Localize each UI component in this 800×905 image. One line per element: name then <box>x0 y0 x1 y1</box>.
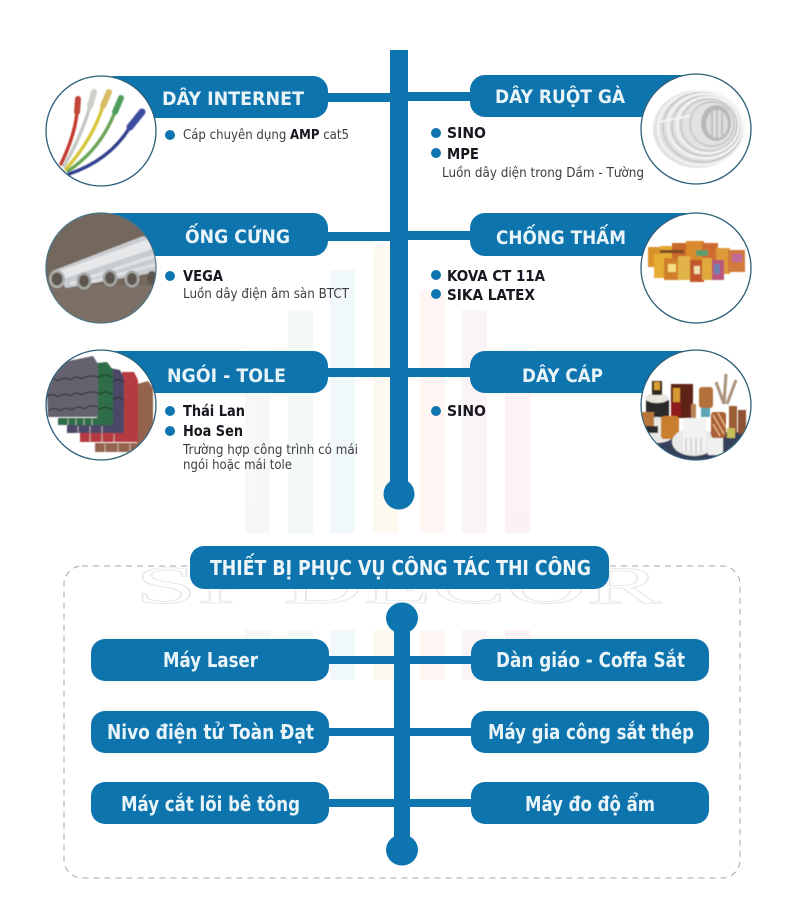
item: Dây cáp <box>405 350 751 460</box>
heading: Chống thấm: CHỐNG THẤM <box>496 225 626 249</box>
heading: Ngói - Tole: NGÓI - TOLE <box>167 365 286 387</box>
section title <box>190 546 609 589</box>
equipment: Dàn giáo - Coffa Sắt <box>471 639 709 681</box>
bullet list: Ngói - Tole: Thái Lan <box>183 402 245 420</box>
bullet list: Dây cáp <box>431 402 486 420</box>
photo: corrugated conduit coil <box>641 74 751 184</box>
item: Chống thấm <box>405 213 751 323</box>
item: Ống cứng <box>46 213 395 325</box>
heading: Ống cứng: ỐNG CỨNG <box>185 224 290 248</box>
bullet list: Dây ruột gà: MPE <box>447 145 479 163</box>
bullet list: Ống cứng <box>165 267 350 302</box>
bullet list: Chống thấm: KOVA CT 11A <box>447 267 545 285</box>
item: Dây Internet <box>46 76 395 186</box>
dashed equipment frame <box>64 566 740 878</box>
equipment: Máy đo độ ẩm: Máy đo độ ẩm <box>525 792 655 816</box>
heading: Dây cáp: DÂY CÁP <box>522 365 603 387</box>
equipment: Nivo điện tử Toàn Đạt: Nivo điện tử Toàn Đạt <box>107 720 314 744</box>
heading: Dây ruột gà: DÂY RUỘT GÀ <box>495 86 626 108</box>
bullet list: Ống cứng: VEGA <box>183 267 223 285</box>
bullet list: Ngói - Tole: Hoa Sen <box>183 422 243 440</box>
watermark: brand name: SP DECOR <box>135 557 662 615</box>
section title: THIẾT BỊ PHỤC VỤ CÔNG TÁC THI CÔNG <box>210 554 591 580</box>
photo: power cables <box>637 350 751 460</box>
heading: Dây Internet: DÂY INTERNET <box>162 88 304 110</box>
photo: network cables <box>46 76 156 186</box>
item: Ngói - Tole <box>46 350 395 473</box>
equipment: Máy gia công sắt thép <box>471 711 709 753</box>
equipment: Máy Laser: Máy Laser <box>163 648 258 672</box>
bullet list: Ngói - Tole: ngói hoặc mái tole <box>183 457 292 473</box>
photo: waterproofing products <box>641 213 751 323</box>
bullet list: Dây Internet: Cáp chuyên dụng AMP cat5 <box>183 127 349 143</box>
equipment: Nivo điện tử Toàn Đạt <box>91 711 329 753</box>
equipment: Máy đo độ ẩm <box>471 782 709 824</box>
top timeline spine <box>384 50 414 510</box>
equipment: Máy Laser <box>91 639 329 681</box>
item: Dây ruột gà <box>405 74 751 184</box>
equipment: Máy gia công sắt thép: Máy gia công sắt thép <box>488 720 694 744</box>
photo: rigid pipes <box>46 213 158 325</box>
bottom timeline spine <box>320 602 480 866</box>
bullet list: Ngói - Tole <box>165 402 358 473</box>
equipment: Dàn giáo - Coffa Sắt: Dàn giáo - Coffa Sắt <box>496 648 685 672</box>
bullet list: Dây ruột gà: Luồn dây diện trong Dầm - Tường <box>442 164 644 181</box>
bullet list: Dây ruột gà <box>431 124 644 181</box>
bullet list: Dây ruột gà: SINO <box>447 124 486 142</box>
bullet list: Chống thấm: SIKA LATEX <box>447 286 535 304</box>
bullet list: Dây cáp: SINO <box>447 402 486 420</box>
bullet list: Ngói - Tole: Trường hợp công trình có mái <box>182 442 358 458</box>
photo: roof tiles <box>46 350 156 460</box>
bullet list: Ống cứng: Luồn dây điện âm sàn BTCT <box>183 285 350 302</box>
bullet list: Chống thấm <box>431 267 545 304</box>
watermark: coloured bars <box>245 245 530 680</box>
equipment: Máy cắt lõi bê tông <box>91 782 329 824</box>
equipment: Máy cắt lõi bê tông: Máy cắt lõi bê tông <box>121 792 300 816</box>
